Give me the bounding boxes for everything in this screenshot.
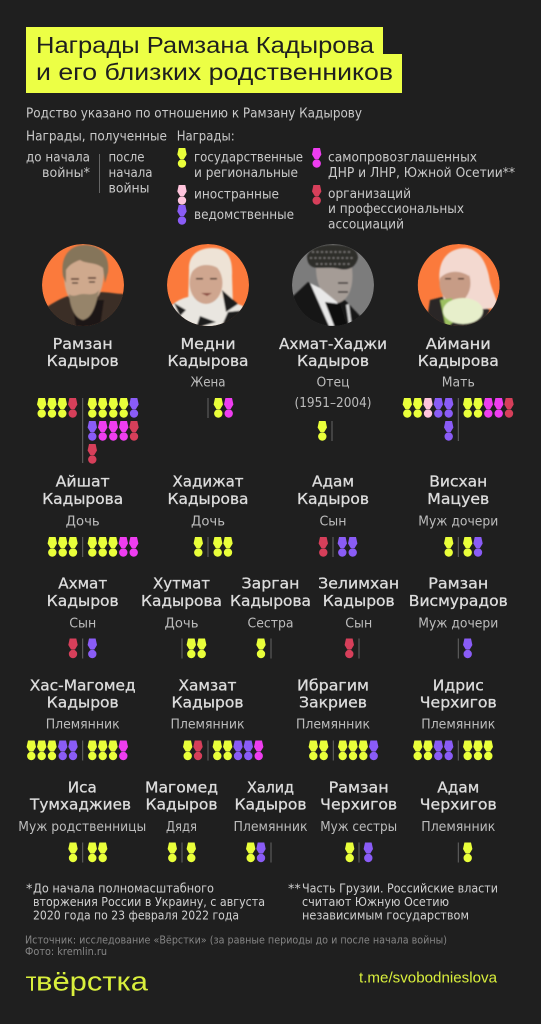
person: Адам Черхигов: Племянник — [421, 820, 495, 835]
person: Ибрагим Закриев: Закриев — [299, 694, 367, 712]
person: Медни Кадырова — [168, 335, 248, 418]
portrait: Аймани Кадырова — [418, 244, 500, 330]
person: Висхан Мацуев: Висхан — [429, 473, 487, 491]
person: Зелимхан Кадыров — [318, 575, 399, 658]
person: Иса Тумхаджиев: Муж родственницы — [18, 820, 146, 835]
person: Иса Тумхаджиев: Иса — [68, 779, 97, 797]
legend: period: начала — [108, 166, 152, 181]
person: Рамзан Кадыров: Кадыров — [47, 352, 119, 370]
person: Аймани Кадырова: Аймани — [426, 335, 491, 353]
person: Рамзан Черхигов: Рамзан — [329, 779, 389, 797]
person: Халид Кадыров: Халид — [247, 779, 294, 797]
portrait: Ахмат-Хаджи Кадыров — [290, 244, 374, 330]
subtitle: Родство указано по отношению к Рамзану Кадырову — [26, 106, 362, 122]
footnote: before the war — [26, 882, 265, 923]
person: Адам Кадыров: Кадыров — [297, 490, 369, 508]
footnote: South Ossetia — [288, 882, 498, 923]
person: Медни Кадырова: Жена — [190, 376, 226, 390]
portrait: Медни Кадырова — [167, 244, 249, 330]
person: Хас-Магомед Кадыров: Кадыров — [47, 694, 119, 712]
person: Ибрагим Закриев: Племянник — [296, 718, 370, 733]
legend: award types: ДНР и ЛНР, Южной Осетии** — [328, 166, 515, 181]
title — [26, 27, 402, 93]
person: Зарган Кадырова: Кадырова — [230, 592, 311, 610]
person: Рамзан Кадыров — [37, 335, 139, 464]
footnote: South Ossetia: считают Южную Осетию — [302, 895, 449, 910]
person: Халид Кадыров: Кадыров — [234, 796, 306, 814]
person: Ахмат Кадыров — [47, 575, 119, 658]
footnote: South Ossetia: Часть Грузии. Российские власти — [302, 882, 498, 897]
person: Адам Черхигов: Черхигов — [420, 796, 497, 814]
person: Айшат Кадырова — [42, 473, 138, 557]
footnote: before the war: вторжения России в Украину, с августа — [33, 895, 265, 910]
person: Аймани Кадырова: Мать — [442, 376, 475, 390]
person: Хамзат Кадыров: Хамзат — [178, 677, 236, 695]
person: Зелимхан Кадыров: Кадыров — [323, 592, 395, 610]
legend: award types: ассоциаций — [328, 218, 404, 233]
person: Адам Черхигов: Адам — [437, 779, 479, 797]
legend: period: войны — [108, 182, 150, 197]
legend: period: после — [108, 151, 144, 166]
person: Иса Тумхаджиев: Тумхаджиев — [29, 796, 131, 814]
person: Халид Кадыров: Племянник — [234, 820, 308, 835]
legend: award types — [177, 130, 515, 233]
portrait: Рамзан Кадыров — [42, 244, 124, 330]
person: Рамзан Висмурадов: Рамзан — [428, 575, 488, 593]
person: Зелимхан Кадыров: Сын — [345, 616, 372, 631]
person: Хутмат Кадырова: Кадырова — [141, 592, 222, 610]
person: Хадижат Кадырова: Хадижат — [172, 473, 244, 491]
person: Айшат Кадырова: Кадырова — [42, 490, 123, 508]
person: Рамзан Черхигов — [320, 779, 397, 862]
person: Зарган Кадырова — [230, 575, 311, 658]
person: Адам Кадыров: Сын — [320, 514, 346, 529]
person: Зарган Кадырова: Зарган — [242, 575, 300, 593]
person: Адам Кадыров — [297, 473, 369, 557]
footnote: before the war: До начала полномасштабного — [33, 882, 214, 897]
person: Идрис Черхигов — [413, 677, 497, 760]
person: Медни Кадырова: Медни — [180, 335, 236, 353]
footnote: before the war: * — [26, 882, 33, 897]
legend: award types: и региональные — [194, 166, 298, 181]
person: Хамзат Кадыров: Кадыров — [172, 694, 244, 712]
person: Ахмат Кадыров: Кадыров — [47, 592, 119, 610]
person: Хас-Магомед Кадыров: Племянник — [46, 718, 120, 733]
person: Магомед Кадыров: Магомед — [145, 779, 218, 797]
person: Идрис Черхигов: Идрис — [433, 677, 484, 695]
person: Айшат Кадырова: Айшат — [56, 473, 110, 491]
legend: award types: Награды: — [177, 130, 235, 145]
person: Зарган Кадырова: Сестра — [248, 616, 294, 631]
legend: award types: ведомственные — [194, 208, 294, 223]
person: Хас-Магомед Кадыров — [27, 677, 136, 760]
telegram link: t.me/svobodnieslova — [359, 971, 498, 987]
person: Идрис Черхигов: Черхигов — [420, 694, 497, 712]
person: Ахмат Кадыров: Ахмат — [58, 575, 107, 593]
person: Иса Тумхаджиев — [18, 779, 146, 862]
person: Хадижат Кадырова: Дочь — [191, 514, 225, 529]
person: Магомед Кадыров — [145, 779, 218, 862]
legend: award types: иностранные — [194, 188, 279, 203]
person: Хас-Магомед Кадыров: Хас-Магомед — [30, 677, 136, 695]
person: Висхан Мацуев — [418, 473, 498, 557]
person: Хутмат Кадырова: Хутмат — [153, 575, 210, 593]
person: Ибрагим Закриев: Ибрагим — [297, 677, 369, 695]
source: Фото: kremlin.ru — [25, 945, 107, 958]
legend: award types: организаций — [328, 187, 411, 202]
legend: period — [26, 130, 167, 197]
person: Хадижат Кадырова: Кадырова — [168, 490, 248, 508]
legend: period: Награды, полученные — [26, 130, 167, 145]
footnote: South Ossetia: независимым государством — [302, 908, 469, 923]
person: Ибрагим Закриев — [296, 677, 378, 760]
legend: award types: самопровозглашенных — [328, 151, 477, 166]
legend: award types: и профессиональных — [328, 202, 464, 217]
title: Награды Рамзана Кадырова — [36, 32, 374, 58]
person: Хадижат Кадырова — [168, 473, 248, 557]
person: Хутмат Кадырова — [141, 575, 222, 658]
footnote: before the war: 2020 года по 23 февраля 2022 года — [33, 908, 239, 923]
person: Зелимхан Кадыров: Зелимхан — [318, 575, 399, 593]
person: Хутмат Кадырова: Дочь — [164, 616, 198, 631]
person: Рамзан Висмурадов: Висмурадов — [409, 592, 508, 610]
person: Ахмат-Хаджи Кадыров: Кадыров — [297, 352, 369, 370]
person: Магомед Кадыров: Кадыров — [146, 796, 218, 814]
person: Магомед Кадыров: Дядя — [166, 820, 197, 835]
person: Ахмат-Хаджи Кадыров: Ахмат-Хаджи — [279, 335, 387, 353]
legend: period: до начала — [26, 151, 90, 166]
person: Аймани Кадырова — [403, 335, 514, 441]
person: Ахмат Кадыров: Сын — [69, 616, 96, 631]
legend: award types: государственные — [194, 151, 303, 166]
person: Рамзан Висмурадов — [409, 575, 508, 658]
person: Ахмат-Хаджи Кадыров: Отец — [316, 376, 350, 390]
person: Медни Кадырова: Кадырова — [168, 352, 248, 370]
person: Адам Черхигов — [420, 779, 497, 862]
person: Халид Кадыров — [234, 779, 308, 862]
person: Висхан Мацуев: Муж дочери — [418, 514, 498, 529]
person: Хамзат Кадыров: Племянник — [170, 718, 245, 733]
person: Адам Кадыров: Адам — [312, 473, 354, 491]
logo: вёрстка — [36, 967, 149, 997]
person: Висхан Мацуев: Мацуев — [427, 490, 489, 508]
source: Источник: исследование «Вёрстки» (за равные периоды до и после начала войны) — [25, 933, 447, 946]
person: Хамзат Кадыров — [170, 677, 263, 760]
person: Идрис Черхигов: Племянник — [421, 718, 495, 733]
source — [25, 933, 447, 958]
person: Рамзан Черхигов: Черхигов — [320, 796, 397, 814]
person: Рамзан Висмурадов: Муж дочери — [418, 616, 498, 631]
person: Ахмат-Хаджи Кадыров — [279, 335, 387, 441]
legend: period: войны* — [42, 166, 90, 181]
person: Рамзан Кадыров: Рамзан — [53, 335, 113, 353]
person: Рамзан Черхигов: Муж сестры — [320, 820, 397, 835]
title: и его близких родственников — [36, 59, 393, 85]
footnote: South Ossetia: ** — [288, 882, 301, 897]
person: Айшат Кадырова: Дочь — [66, 514, 100, 529]
person: Аймани Кадырова: Кадырова — [418, 352, 499, 370]
person: Ахмат-Хаджи Кадыров: (1951–2004) — [294, 396, 372, 411]
